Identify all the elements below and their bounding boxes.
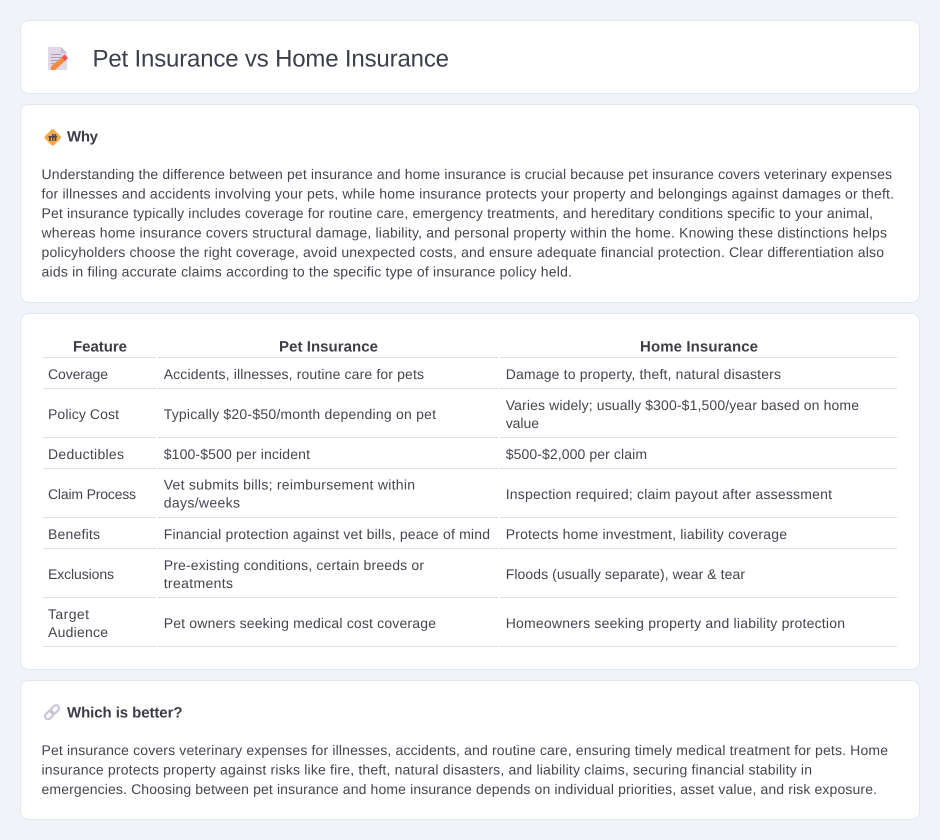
row: deductibles: $100-$500 per incident — [164, 446, 310, 462]
row: benefits: Financial protection against vet bills, peace of mind — [164, 526, 490, 542]
row: target audience: Audience — [48, 624, 108, 640]
row: claim process: days/weeks — [164, 495, 240, 511]
row: policy cost: value — [506, 415, 539, 431]
why paragraph: for illnesses and accidents involving your pets, while home insurance protects your property and belongings against damages or theft. — [42, 186, 894, 202]
row: claim process: Vet submits bills; reimbursement within — [164, 476, 415, 492]
row: coverage — [43, 366, 897, 389]
icon: children crossing sign — [44, 128, 62, 146]
row: coverage: Coverage — [48, 366, 108, 382]
why paragraph: whereas home insurance covers structural damage, liability, and personal property within the home. Knowing these distinctions helps — [40, 224, 887, 240]
row: policy cost: Typically $20-$50/month depending on pet — [164, 406, 436, 422]
row: policy cost — [43, 397, 897, 438]
row: coverage: Accidents, illnesses, routine care for pets — [164, 366, 424, 382]
row: deductibles: $500-$2,000 per claim — [506, 446, 647, 462]
why paragraph: Understanding the difference between pet insurance and home insurance is crucial because pet insurance covers veterinary expenses — [42, 166, 892, 182]
title: Pet Insurance vs Home Insurance — [92, 46, 449, 72]
which paragraph: insurance protects property against risks like fire, theft, natural disasters, and liability claims, securing financial stability in — [42, 762, 812, 778]
which paragraph: emergencies. Choosing between pet insurance and home insurance depends on individual priorities, asset value, and risk exposure. — [42, 781, 877, 797]
row: benefits — [43, 526, 897, 549]
why paragraph: Pet insurance typically includes coverage for routine care, emergency treatments, and hereditary conditions specific to your animal, — [42, 205, 873, 221]
row: deductibles: Deductibles — [48, 446, 124, 462]
panel: comparison table — [20, 314, 920, 670]
table header row: Home Insurance — [640, 339, 758, 356]
row: deductibles — [43, 446, 897, 469]
icon: memo with pencil — [48, 47, 68, 70]
row: target audience — [43, 606, 897, 647]
row: claim process — [43, 476, 897, 518]
which paragraph — [42, 742, 888, 797]
icon: chain link — [44, 704, 60, 720]
why paragraph: policyholders choose the right coverage, avoid unexpected costs, and ensure adequate financial protection. Clear differentiation also — [42, 244, 884, 260]
row: policy cost: Varies widely; usually $300-$1,500/year based on home — [506, 397, 859, 413]
row: exclusions: Exclusions — [48, 566, 114, 582]
row: policy cost: Policy Cost — [48, 406, 119, 422]
panel: which is better — [20, 680, 920, 820]
row: claim process: Claim Process — [48, 486, 136, 502]
heading: why: Why — [67, 128, 99, 146]
table header row — [43, 339, 897, 358]
row: target audience: Homeowners seeking property and liability protection — [506, 615, 845, 631]
why paragraph — [40, 166, 894, 280]
row: exclusions — [43, 557, 897, 598]
table header row: Pet Insurance — [279, 339, 378, 356]
row: exclusions: treatments — [164, 575, 233, 591]
row: target audience: Target — [48, 606, 89, 622]
which paragraph: Pet insurance covers veterinary expenses for illnesses, accidents, and routine care, ensuring timely medical treatment for pets. Home — [42, 742, 888, 758]
row: target audience: Pet owners seeking medical cost coverage — [164, 615, 436, 631]
row: coverage: Damage to property, theft, natural disasters — [506, 366, 781, 382]
table header row: Feature — [73, 339, 127, 356]
row: exclusions: Pre-existing conditions, certain breeds or — [164, 557, 424, 573]
row: benefits: Protects home investment, liability coverage — [506, 526, 787, 542]
row: exclusions: Floods (usually separate), wear & tear — [506, 566, 745, 582]
panel: why — [20, 104, 920, 302]
why paragraph: aids in filing accurate claims according to the specific type of insurance policy held. — [42, 264, 572, 280]
row: claim process: Inspection required; claim payout after assessment — [506, 486, 832, 502]
panel: title header — [20, 20, 920, 94]
row: benefits: Benefits — [48, 526, 100, 542]
heading: which is better: Which is better? — [67, 704, 182, 722]
